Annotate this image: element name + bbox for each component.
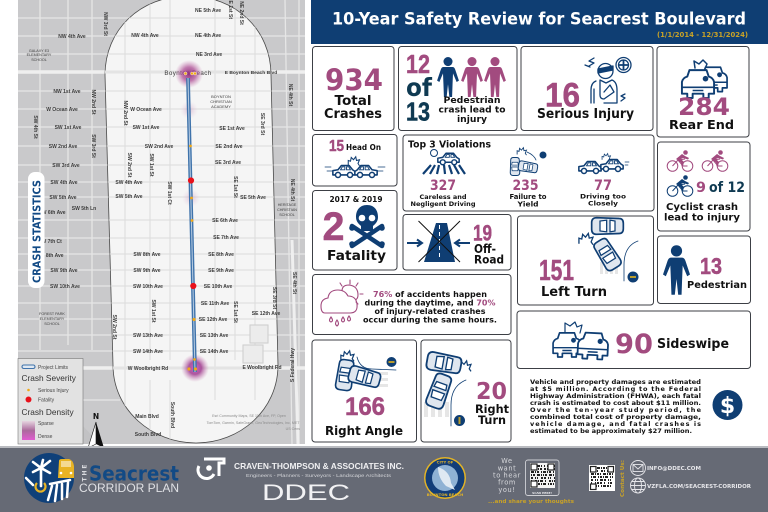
icon: three cyclists [667, 150, 728, 196]
icon: email [630, 460, 646, 476]
panel: serious injury: 16 [545, 76, 580, 114]
logo: Seacrest Corridor Plan: Seacrest [89, 462, 179, 486]
street labels: ELEMENTARY [40, 317, 65, 321]
street labels: US Cens [286, 427, 300, 431]
panel: right angle [312, 340, 416, 442]
street labels [27, 0, 300, 438]
street labels: E Woolbright Rd [242, 365, 282, 371]
street labels: SW 6th Ave [38, 210, 66, 216]
text: email address: INFO@DDEC.COM [647, 466, 701, 472]
street labels: GALAXY E3 [29, 49, 49, 53]
map legend: Project Limits [38, 365, 69, 371]
street labels: BOYNTON [211, 94, 231, 99]
panel: pedestrian: 13 [700, 253, 722, 279]
street labels: SE 5th Ave [240, 195, 266, 201]
street labels: SW 4th Ave [50, 180, 78, 186]
text: we want to hear from you: from [498, 478, 516, 486]
text: we want to hear from you [493, 457, 521, 494]
panel: fatality [312, 190, 397, 270]
map legend: Fatality [38, 398, 55, 404]
panel: serious injury [521, 46, 653, 130]
icon: right angle crash [335, 351, 396, 391]
street labels: SE 13th Ave [200, 333, 228, 339]
icon: web globe [630, 478, 646, 493]
icon: dollar sign [712, 390, 742, 420]
panel: sideswipe: 90 [615, 329, 653, 360]
crash markers [184, 72, 197, 371]
violation: failure to yield: Failure to [510, 192, 547, 201]
logo: Seacrest Corridor Plan [24, 453, 179, 503]
panel: top 3 violations: Top 3 Violations [408, 140, 491, 150]
panel: total crashes: Crashes [324, 107, 382, 122]
street labels: NW 3rd St [102, 12, 108, 36]
street labels: SW 8th Ave [36, 253, 64, 259]
violation: failure to yield: Yield [516, 200, 538, 208]
violation: careless driving: Careless and [420, 193, 467, 201]
street labels: SW 5th Ave [49, 195, 77, 201]
text: and share your thoughts: ...and share your thoughts [488, 499, 574, 505]
panel: total crashes: 934 [325, 63, 383, 97]
panel: head on: 15 [329, 138, 344, 155]
icon: cloud, sun and rain [321, 280, 363, 326]
text: contact us: Contact Us: [620, 460, 626, 497]
panel: pedestrian injury ratio: 12 [406, 49, 430, 79]
street labels: NE 3rd Ave [196, 52, 222, 58]
icon: three pedestrians [437, 57, 506, 97]
street labels: SCHOOL [31, 58, 47, 62]
violation: driving too closely: 77 [594, 178, 612, 194]
damage cost text block: combined total cost of property damage, [530, 413, 701, 421]
panel: right turn: Turn [478, 413, 506, 427]
damage cost text block [530, 378, 702, 435]
street labels: SW 8th Ave [133, 252, 161, 258]
street labels: NW 1st Ave [53, 89, 81, 95]
panel: cyclist: 9 [696, 180, 706, 196]
street labels: NE 4th Ave [195, 33, 221, 39]
street labels: SW 1st St [150, 299, 156, 323]
map legend: Crash Density [22, 407, 74, 417]
street labels: CHRISTIAN [277, 208, 297, 212]
street labels: SE 14th Ave [200, 349, 228, 355]
seal: City of Boynton Beach: CITY OF [437, 460, 454, 464]
street labels: SW 1st Ave [55, 125, 82, 131]
panel: left turn: Left Turn [541, 285, 607, 300]
QR code: share your thoughts [526, 460, 559, 496]
street labels: SW 7th Ct [38, 239, 62, 245]
street labels: SE 3rd St [271, 287, 277, 309]
panel: left turn [518, 216, 654, 305]
street labels: SE 4th St [291, 272, 297, 294]
street labels: SE 9th Ave [208, 268, 234, 274]
icon: sideswipe crash [553, 322, 609, 360]
street labels: SE 12th Ave [199, 317, 227, 323]
street labels: E Boynton Beach Blvd [225, 70, 277, 76]
panel: rear end: 284 [678, 93, 730, 121]
panel: left turn: 151 [539, 255, 574, 287]
street labels: W Ocean Ave [130, 107, 162, 113]
street labels: W Ocean Ave [46, 107, 78, 113]
crash statistics tab [28, 172, 44, 288]
panel: off-road: Road [474, 252, 504, 266]
panel: pedestrian injury ratio: injury [457, 115, 487, 125]
street labels: SW 1st St [148, 153, 154, 177]
street labels: SW 1st Ct [166, 181, 172, 205]
street labels: NE 4th St [289, 179, 295, 201]
street labels: SCHOOL [279, 213, 295, 217]
map legend: Dense [38, 434, 53, 440]
street labels: SE 1st Ave [219, 126, 245, 132]
violation: failure to yield: 235 [512, 178, 538, 194]
panel: pedestrian injury ratio: crash lead to [438, 106, 506, 116]
damage cost text block: Over the ten-year study period, the [530, 406, 702, 414]
panel: fatality: 2 [322, 205, 344, 249]
street labels: SW 9th Ave [133, 268, 161, 274]
street labels: SE 7th Ave [213, 235, 239, 241]
street labels: NE 5th Ave [195, 8, 221, 14]
damage cost text block: Highway Administration (FHWA), each fatal [530, 392, 701, 400]
panel: cyclist: lead to injury [664, 212, 740, 224]
panel: pedestrian [658, 236, 750, 304]
logo: Craven-Thompson & Associates [198, 459, 404, 478]
panel: daytime statistic: of injury-related crashes [374, 307, 486, 316]
street labels: SE 6th Ave [212, 218, 238, 224]
violation: failure to yield [510, 148, 547, 208]
text: we want to hear from you: want [498, 464, 516, 472]
street labels: South Blvd [169, 402, 175, 428]
crash density glows [175, 60, 209, 382]
icon: right turn crash [424, 351, 471, 426]
logo: Craven-Thompson & Associates: Engineers - Planners - Surveyors - Landscape Architects [246, 473, 392, 478]
street labels: ACADEMY [211, 104, 231, 109]
footer band [0, 446, 768, 512]
icon: pedestrian [663, 245, 690, 295]
icon: crossed-out road [407, 221, 470, 262]
project corridor line [188, 78, 195, 372]
panel: rear end: Rear End [669, 118, 734, 132]
violation: driving too closely: Closely [588, 200, 619, 208]
street labels: South Blvd [135, 432, 161, 438]
title banner: (1/1/2014 - 12/31/2024) [657, 31, 748, 39]
panel: serious injury: Serious Injury [537, 107, 634, 122]
panel: daytime statistic: during the daytime, and 70% [364, 298, 496, 308]
violation: careless driving: 327 [430, 178, 456, 194]
street labels: NW 2nd St [90, 90, 96, 115]
QR code: contact [589, 465, 615, 491]
damage cost text block: crash is estimated to cost about $11 million. [530, 399, 701, 407]
street labels: NW 2nd St [122, 100, 128, 126]
street labels: TomTom, Garmin, SafeGraph, GeoTechnologies, Inc, MET [207, 421, 300, 425]
panel: fatality: Fatality [327, 249, 387, 264]
icon: rear-end crash [682, 60, 727, 98]
panel: rear end [657, 46, 749, 137]
map: crash locations along Seacrest Boulevard [0, 0, 305, 448]
street labels: SW 2nd Ave [145, 144, 173, 150]
street labels: SW 4th St [32, 115, 38, 139]
street labels: W Woolbright Rd [128, 366, 168, 372]
street labels: Esri Community Maps, SE 15th Ave, FP, Open [212, 414, 286, 418]
street labels: SE 1st St [232, 176, 238, 198]
street labels: SW 4th Ave [115, 180, 143, 186]
panel: right angle: Right Angle [325, 424, 403, 438]
street labels: SW 3rd St [90, 134, 96, 158]
street labels: Boynton Beach [164, 70, 212, 77]
street labels: SW 13th Ave [133, 333, 163, 339]
street labels: Main Blvd [135, 414, 159, 420]
map legend: Sparse [38, 421, 54, 427]
map legend: Serious Injury [38, 388, 69, 394]
street labels: SE 11th Ave [201, 301, 229, 307]
damage cost text block: at $5 million. According to the Federal [530, 385, 701, 393]
panel: head on [312, 134, 397, 186]
street labels: ELEMENTARY [27, 53, 52, 57]
panel: cyclist: of 12 [709, 180, 745, 196]
panel: cyclist [658, 142, 750, 231]
street labels: SW 14th Ave [133, 349, 163, 355]
panel: right turn: 20 [476, 379, 507, 405]
logo: Seacrest Corridor Plan: CORRIDOR PLAN [79, 483, 179, 495]
street labels: HERITAGE [278, 203, 297, 207]
panel: pedestrian injury ratio: Pedestrian [444, 96, 500, 106]
panel: pedestrian injury ratio: 13 [406, 96, 430, 126]
panel: daytime statistic: 76% of accidents happen [373, 290, 487, 299]
violation: careless driving [410, 150, 476, 208]
panel: off-road: Off- [474, 242, 496, 256]
street labels: SE 12th Ave [252, 311, 280, 317]
logo: DDEC: DDEC [262, 480, 350, 505]
damage cost text block: Vehicle and property damages are estimated [530, 378, 701, 386]
street labels: SE 3rd St [259, 113, 265, 135]
street labels: NE 4th St [287, 84, 293, 106]
panel: pedestrian injury ratio: of [406, 73, 433, 102]
map legend [18, 358, 83, 444]
panel: daytime statistic: occur during the same hours. [363, 316, 497, 324]
map legend: Crash Severity [22, 373, 77, 383]
seal: City of Boynton Beach: BOYNTON BEACH [427, 492, 463, 497]
QR code: share your thoughts: SCAN HERE! [532, 491, 552, 495]
violation: careless driving: Negligent Driving [410, 200, 476, 208]
damage cost text block: vehicle damage, and fatal crashes is [530, 420, 701, 428]
icon: dollar sign: $ [720, 394, 735, 419]
icon: injured person [585, 58, 631, 103]
panel: total crashes: Total [334, 94, 372, 109]
panel: sideswipe: Sideswipe [657, 337, 729, 352]
street labels: SW 10th Ave [50, 284, 80, 290]
street labels: SW 2nd St [126, 153, 132, 178]
street labels: SW 2nd Ave [49, 144, 77, 150]
street labels: SE 8th Ave [208, 252, 234, 258]
panel: right turn [421, 340, 511, 442]
icon: skull and crossbones [349, 205, 385, 247]
panel: total crashes [312, 46, 394, 130]
logo: Seacrest Corridor Plan: THE [82, 464, 88, 482]
street labels: SW 3rd Ave [52, 163, 80, 169]
crash statistics tab: CRASH STATISTICS [32, 180, 44, 283]
panel: top 3 violations [403, 135, 654, 211]
panel: head on: Head On [346, 143, 381, 152]
icon: left turn crash [579, 218, 638, 282]
text: we want to hear from you: you! [498, 486, 516, 494]
damage cost text block: estimated to be approximately $27 million. [530, 427, 692, 435]
panel: off-road [403, 214, 511, 270]
title banner: 10-Year Safety Review for Seacrest Boulevard [332, 10, 746, 30]
street labels: SE 10th Ave [204, 284, 232, 290]
north arrow: N [93, 412, 99, 421]
street labels: SW 1st Ave [133, 125, 160, 131]
panel: right angle: 166 [345, 393, 385, 421]
panel: pedestrian: Pedestrian [687, 280, 747, 291]
street labels: NE 2nd St [238, 1, 244, 25]
text: website address: VZFLA.COM/SEACREST-CORRIDOR [647, 484, 751, 490]
street labels: CHRISTIAN [210, 99, 232, 104]
panel: pedestrian injury ratio [398, 46, 517, 130]
panel: right turn: Right [475, 402, 509, 416]
title banner [311, 0, 768, 44]
panel: daytime statistic [312, 274, 511, 334]
street labels: SW 9th Ave [50, 268, 78, 274]
street labels: SCHOOL [44, 322, 60, 326]
street labels: SW 2nd St [111, 315, 117, 340]
street labels: SE 3rd Ave [215, 160, 241, 166]
street labels: NW 4th Ave [58, 34, 86, 40]
violation: driving too closely [579, 154, 629, 208]
street labels: SE 2nd Ave [215, 144, 243, 150]
street labels: SE 1st St [232, 301, 238, 323]
panel: cyclist: Cyclist crash [666, 202, 738, 213]
street labels: SW 5th Ln [72, 206, 96, 212]
street labels: NW 4th Ave [131, 33, 159, 39]
street labels: SW 5th Ave [115, 194, 143, 200]
north arrow [88, 412, 104, 448]
violation: driving too closely: Driving too [580, 192, 627, 200]
logo: Craven-Thompson & Associates: CRAVEN-THOMPSON & ASSOCIATES INC. [234, 461, 404, 471]
panel: fatality: 2017 & 2019 [330, 195, 382, 204]
street labels: S Federal Hwy [290, 348, 296, 382]
street labels: FOREST PARK [39, 312, 65, 316]
street labels: SW 10th Ave [133, 284, 163, 290]
panel: off-road: 19 [473, 220, 492, 246]
seal: City of Boynton Beach [424, 457, 466, 499]
text: we want to hear from you: We [501, 457, 513, 465]
panel: sideswipe [517, 311, 750, 368]
text: we want to hear from you: to hear [493, 472, 521, 480]
icon: head-on crash [325, 157, 385, 178]
